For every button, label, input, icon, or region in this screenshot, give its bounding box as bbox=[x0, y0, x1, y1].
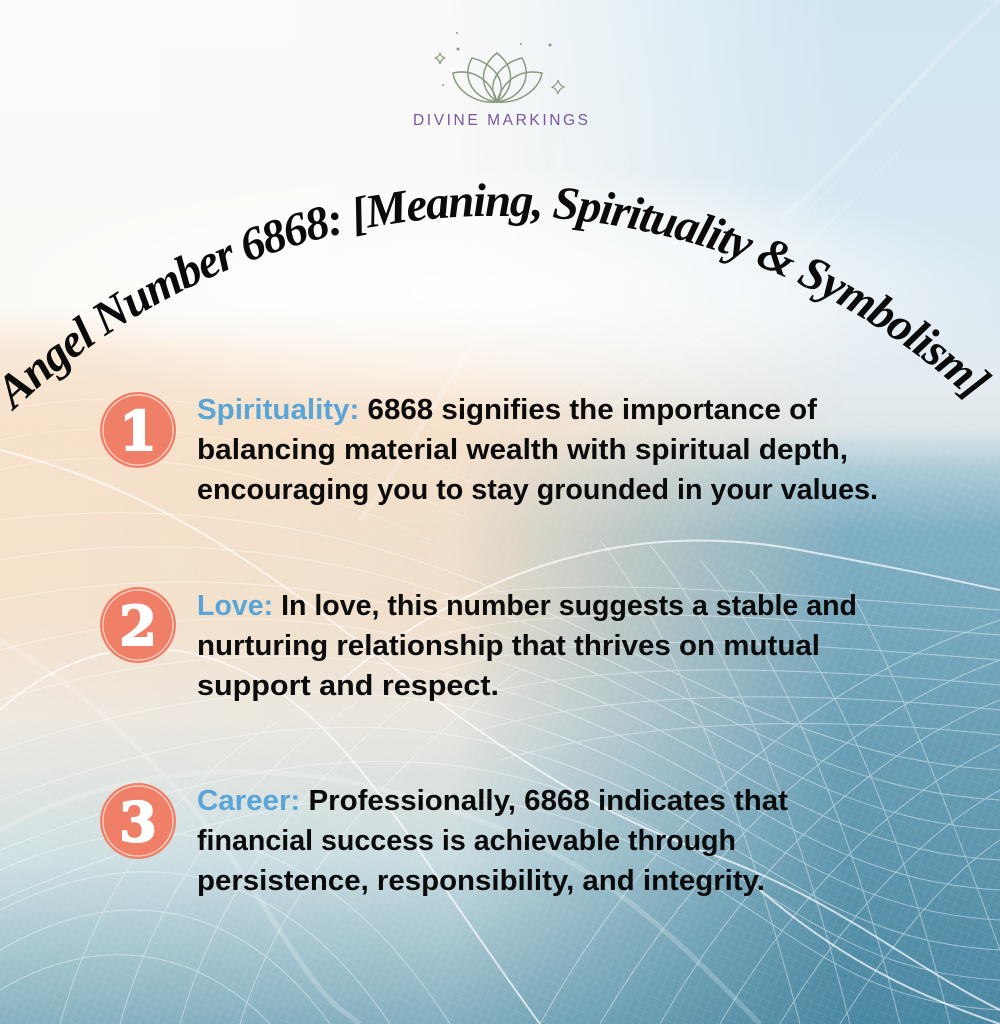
number badge 3 bbox=[100, 783, 176, 859]
number badge 2 bbox=[100, 587, 176, 663]
item 2: love bbox=[100, 587, 857, 702]
text block 2: nurturing relationship that thrives on mutual bbox=[197, 630, 820, 662]
number badge 1: 1 bbox=[119, 399, 157, 463]
icon: sparkles bbox=[435, 53, 564, 94]
text block 3: Career: Professionally, 6868 indicates that bbox=[197, 785, 788, 817]
text block 3: financial success is achievable through bbox=[197, 825, 736, 857]
number badge 3: 3 bbox=[119, 790, 157, 854]
title: curved heading: Angel Number 6868: [Meaning, Spirituality & Symbolism] bbox=[4, 183, 993, 412]
number badge 1 bbox=[100, 392, 176, 468]
text block 2: Love: In love, this number suggests a stable and bbox=[197, 590, 857, 622]
item 3: career bbox=[100, 783, 788, 897]
icon: star dots bbox=[442, 32, 552, 86]
number badge 2: 2 bbox=[119, 594, 157, 658]
logo: Divine Markings bbox=[413, 32, 588, 129]
item 1: spirituality bbox=[100, 392, 878, 506]
text block 2: support and respect. bbox=[197, 670, 499, 702]
text block 3: persistence, responsibility, and integrity. bbox=[197, 865, 765, 897]
text block 1: balancing material wealth with spiritual depth, bbox=[197, 434, 848, 466]
logo wordmark: DIVINE MARKINGS bbox=[413, 112, 588, 129]
icon: lotus bbox=[453, 53, 542, 102]
text block 1 bbox=[197, 394, 878, 506]
text block 1: Spirituality: 6868 signifies the importance of bbox=[197, 394, 817, 426]
text block 1: encouraging you to stay grounded in your values. bbox=[197, 474, 878, 506]
text block 3 bbox=[197, 785, 788, 897]
text block 2 bbox=[197, 590, 857, 702]
